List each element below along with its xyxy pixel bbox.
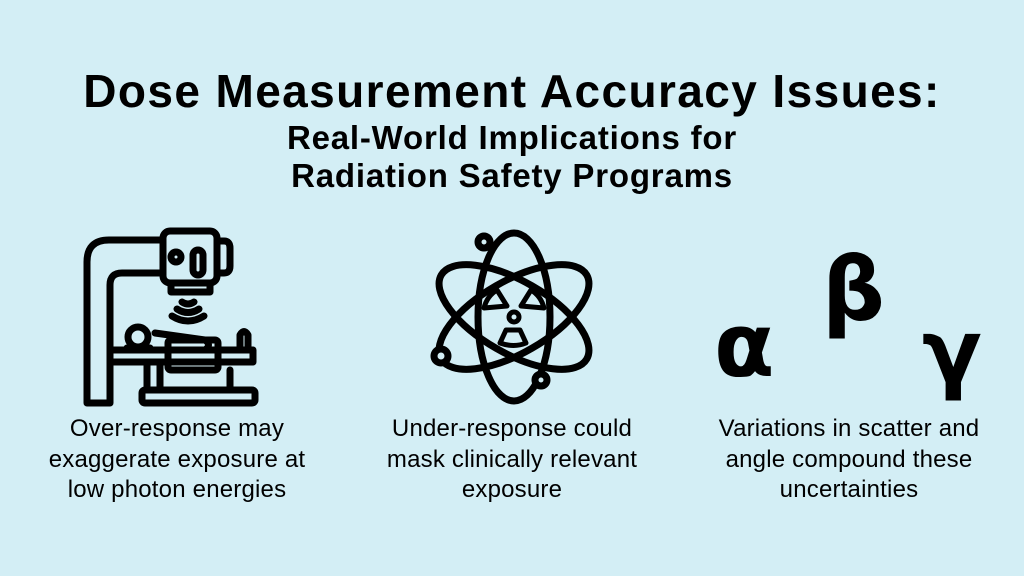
subtitle [287, 119, 737, 194]
subtitle: Radiation Safety Programs [291, 157, 733, 194]
icon: greek letters [714, 238, 982, 403]
caption 1: Over-response may exaggerate exposure at low photon energies [49, 415, 305, 503]
icon: x-ray machine [84, 228, 258, 406]
title: Dose Measurement Accuracy Issues: [83, 65, 941, 117]
subtitle: Real-World Implications for [287, 119, 737, 156]
icon: greek letters: α [714, 294, 774, 397]
icon: greek letters: β [822, 238, 885, 341]
caption 2: Under-response could mask clinically relevant exposure [387, 415, 637, 503]
icon: greek letters: γ [922, 300, 982, 403]
caption 3: Variations in scatter and angle compound these uncertainties [719, 415, 979, 503]
icon: atom [430, 230, 592, 404]
